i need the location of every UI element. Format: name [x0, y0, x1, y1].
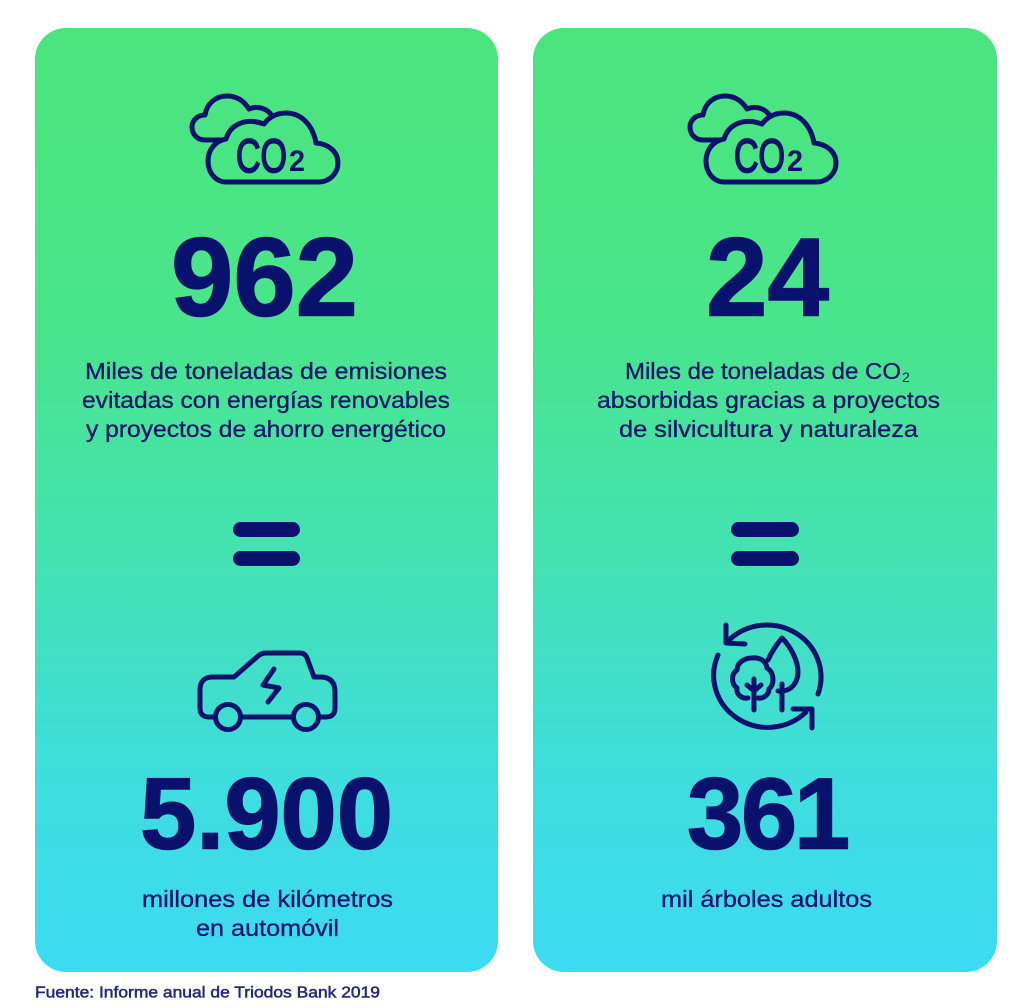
- equals sign left: [233, 522, 300, 566]
- number: 361: 361: [687, 758, 850, 870]
- equivalence: trees: mil árboles adultos: [661, 886, 872, 912]
- description: emissions avoided: y proyectos de ahorro energético: [86, 416, 446, 442]
- panel: emissions avoided: [35, 28, 498, 972]
- icon: CO2 clouds right: CO: [734, 129, 785, 182]
- description: CO2 absorbed: absorbidas gracias a proyectos: [597, 387, 940, 413]
- icon: CO2 clouds right: [690, 96, 836, 182]
- icon: CO2 clouds left: CO: [236, 129, 287, 182]
- panel background left: [35, 28, 498, 972]
- panel: CO2 absorbed: [533, 28, 997, 972]
- description: CO2 absorbed: Miles de toneladas de CO: [625, 358, 901, 384]
- description: CO2 absorbed: 2: [902, 369, 910, 385]
- icon: CO2 clouds right: 2: [787, 145, 803, 178]
- description: emissions avoided: evitadas con energías renovables: [82, 387, 450, 413]
- description: emissions avoided: Miles de toneladas de emisiones: [85, 358, 447, 384]
- number: 962: 962: [171, 216, 358, 340]
- icon: CO2 clouds left: 2: [289, 145, 305, 178]
- description: emissions avoided: [82, 358, 450, 442]
- icon: electric car: [200, 653, 335, 730]
- source note: Fuente: Informe anual de Triodos Bank 2019: [35, 984, 380, 1002]
- panel background right: [533, 28, 997, 972]
- description: CO2 absorbed: de silvicultura y naturaleza: [619, 416, 918, 442]
- description: CO2 absorbed: [597, 358, 940, 442]
- number: 24: 24: [706, 216, 829, 340]
- icon: CO2 clouds left: [192, 96, 338, 182]
- icon: trees in cycle: [714, 625, 821, 728]
- equals sign right: [731, 522, 799, 566]
- equivalence: kilometres: [142, 886, 393, 941]
- equivalence: kilometres: en automóvil: [196, 915, 339, 941]
- number: 5.900: 5.900: [140, 758, 393, 870]
- equivalence: kilometres: millones de kilómetros: [142, 886, 393, 912]
